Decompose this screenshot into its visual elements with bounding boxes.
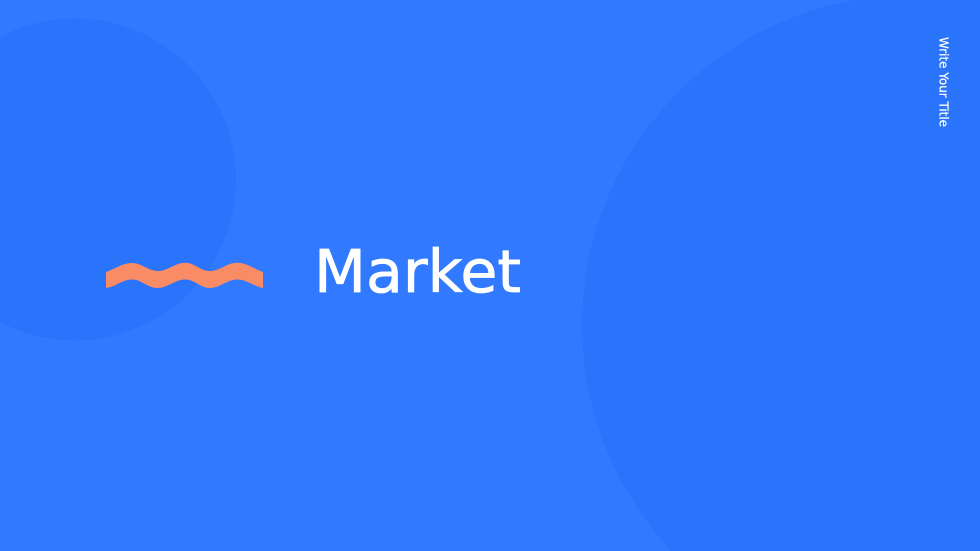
left background circle: [0, 18, 236, 340]
right background circle: [582, 0, 980, 551]
title: Market: [314, 237, 521, 306]
icon: orange wave: [106, 263, 263, 288]
vertical label: Write Your Title: [936, 37, 950, 127]
